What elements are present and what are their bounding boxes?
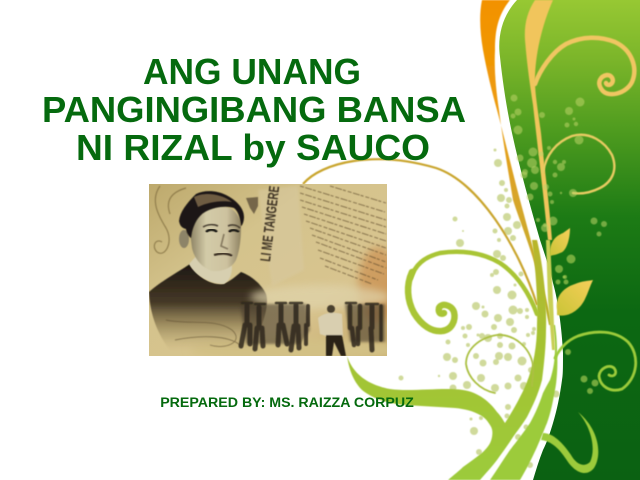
photo: Noli Me Tangere headline: LI ME TANGERE [257,185,283,262]
icon: middle cream spiral [543,135,614,193]
photo: mouth [214,254,232,256]
icon: top cream spiral [535,38,634,94]
photo: orange burn at right edge [354,244,387,322]
photo: newspaper column [258,186,304,286]
icon: large lime spiral curl [408,272,454,331]
photo: hair [179,191,244,238]
photo: ear [179,230,189,248]
photo: haze behind crowd [250,285,390,309]
icon: small olive spiral [466,335,533,393]
title: ANG UNANG [143,51,361,92]
icon: inner lime stem [490,325,557,480]
photo: firing squad crowd [241,303,381,350]
dots: white area scatter [398,148,560,468]
icon: bottom right lime curl [541,412,598,473]
icon: large lime spiral [411,252,537,314]
photo: eyes [206,230,239,232]
photo: warm lower band [204,340,387,356]
panel: green curved background [499,0,640,480]
dots: upper green area [510,94,607,236]
icon: thin gold arc across title [303,159,537,305]
photo: jacket [149,264,267,350]
icon: lower yellow leaf [557,280,593,316]
photo: hair highlight [194,194,232,207]
title: PANGINGIBANG BANSA [42,89,466,130]
photo: nose shadow [221,234,228,249]
dots: right green area [555,254,598,394]
photo: small sketch [246,197,258,214]
icon: main lime swoosh and trunk [347,240,546,480]
photo: handwritten letter lines [300,186,386,284]
photo: neck and collar [188,257,232,285]
photo: Rizal collage [149,184,387,356]
icon: right lime spiral [555,332,636,390]
icon: upper yellow leaf [550,228,570,256]
icon: cream stem [525,0,553,240]
photo: left flourish [154,186,186,253]
photo: foreground figure [318,305,346,356]
title [42,51,466,168]
icon: orange swoosh [480,0,552,325]
photo: face [190,206,241,271]
photo: eyebrows [203,225,240,228]
title: NI RIZAL by SAUCO [76,127,430,168]
footer: prepared by: PREPARED BY: MS. RAIZZA CORPUZ [160,395,414,411]
photo: crowd silhouette shading [240,304,385,344]
icon: cream-to-lime right stem [546,240,555,350]
photo: jacket swirl lines [166,320,240,347]
